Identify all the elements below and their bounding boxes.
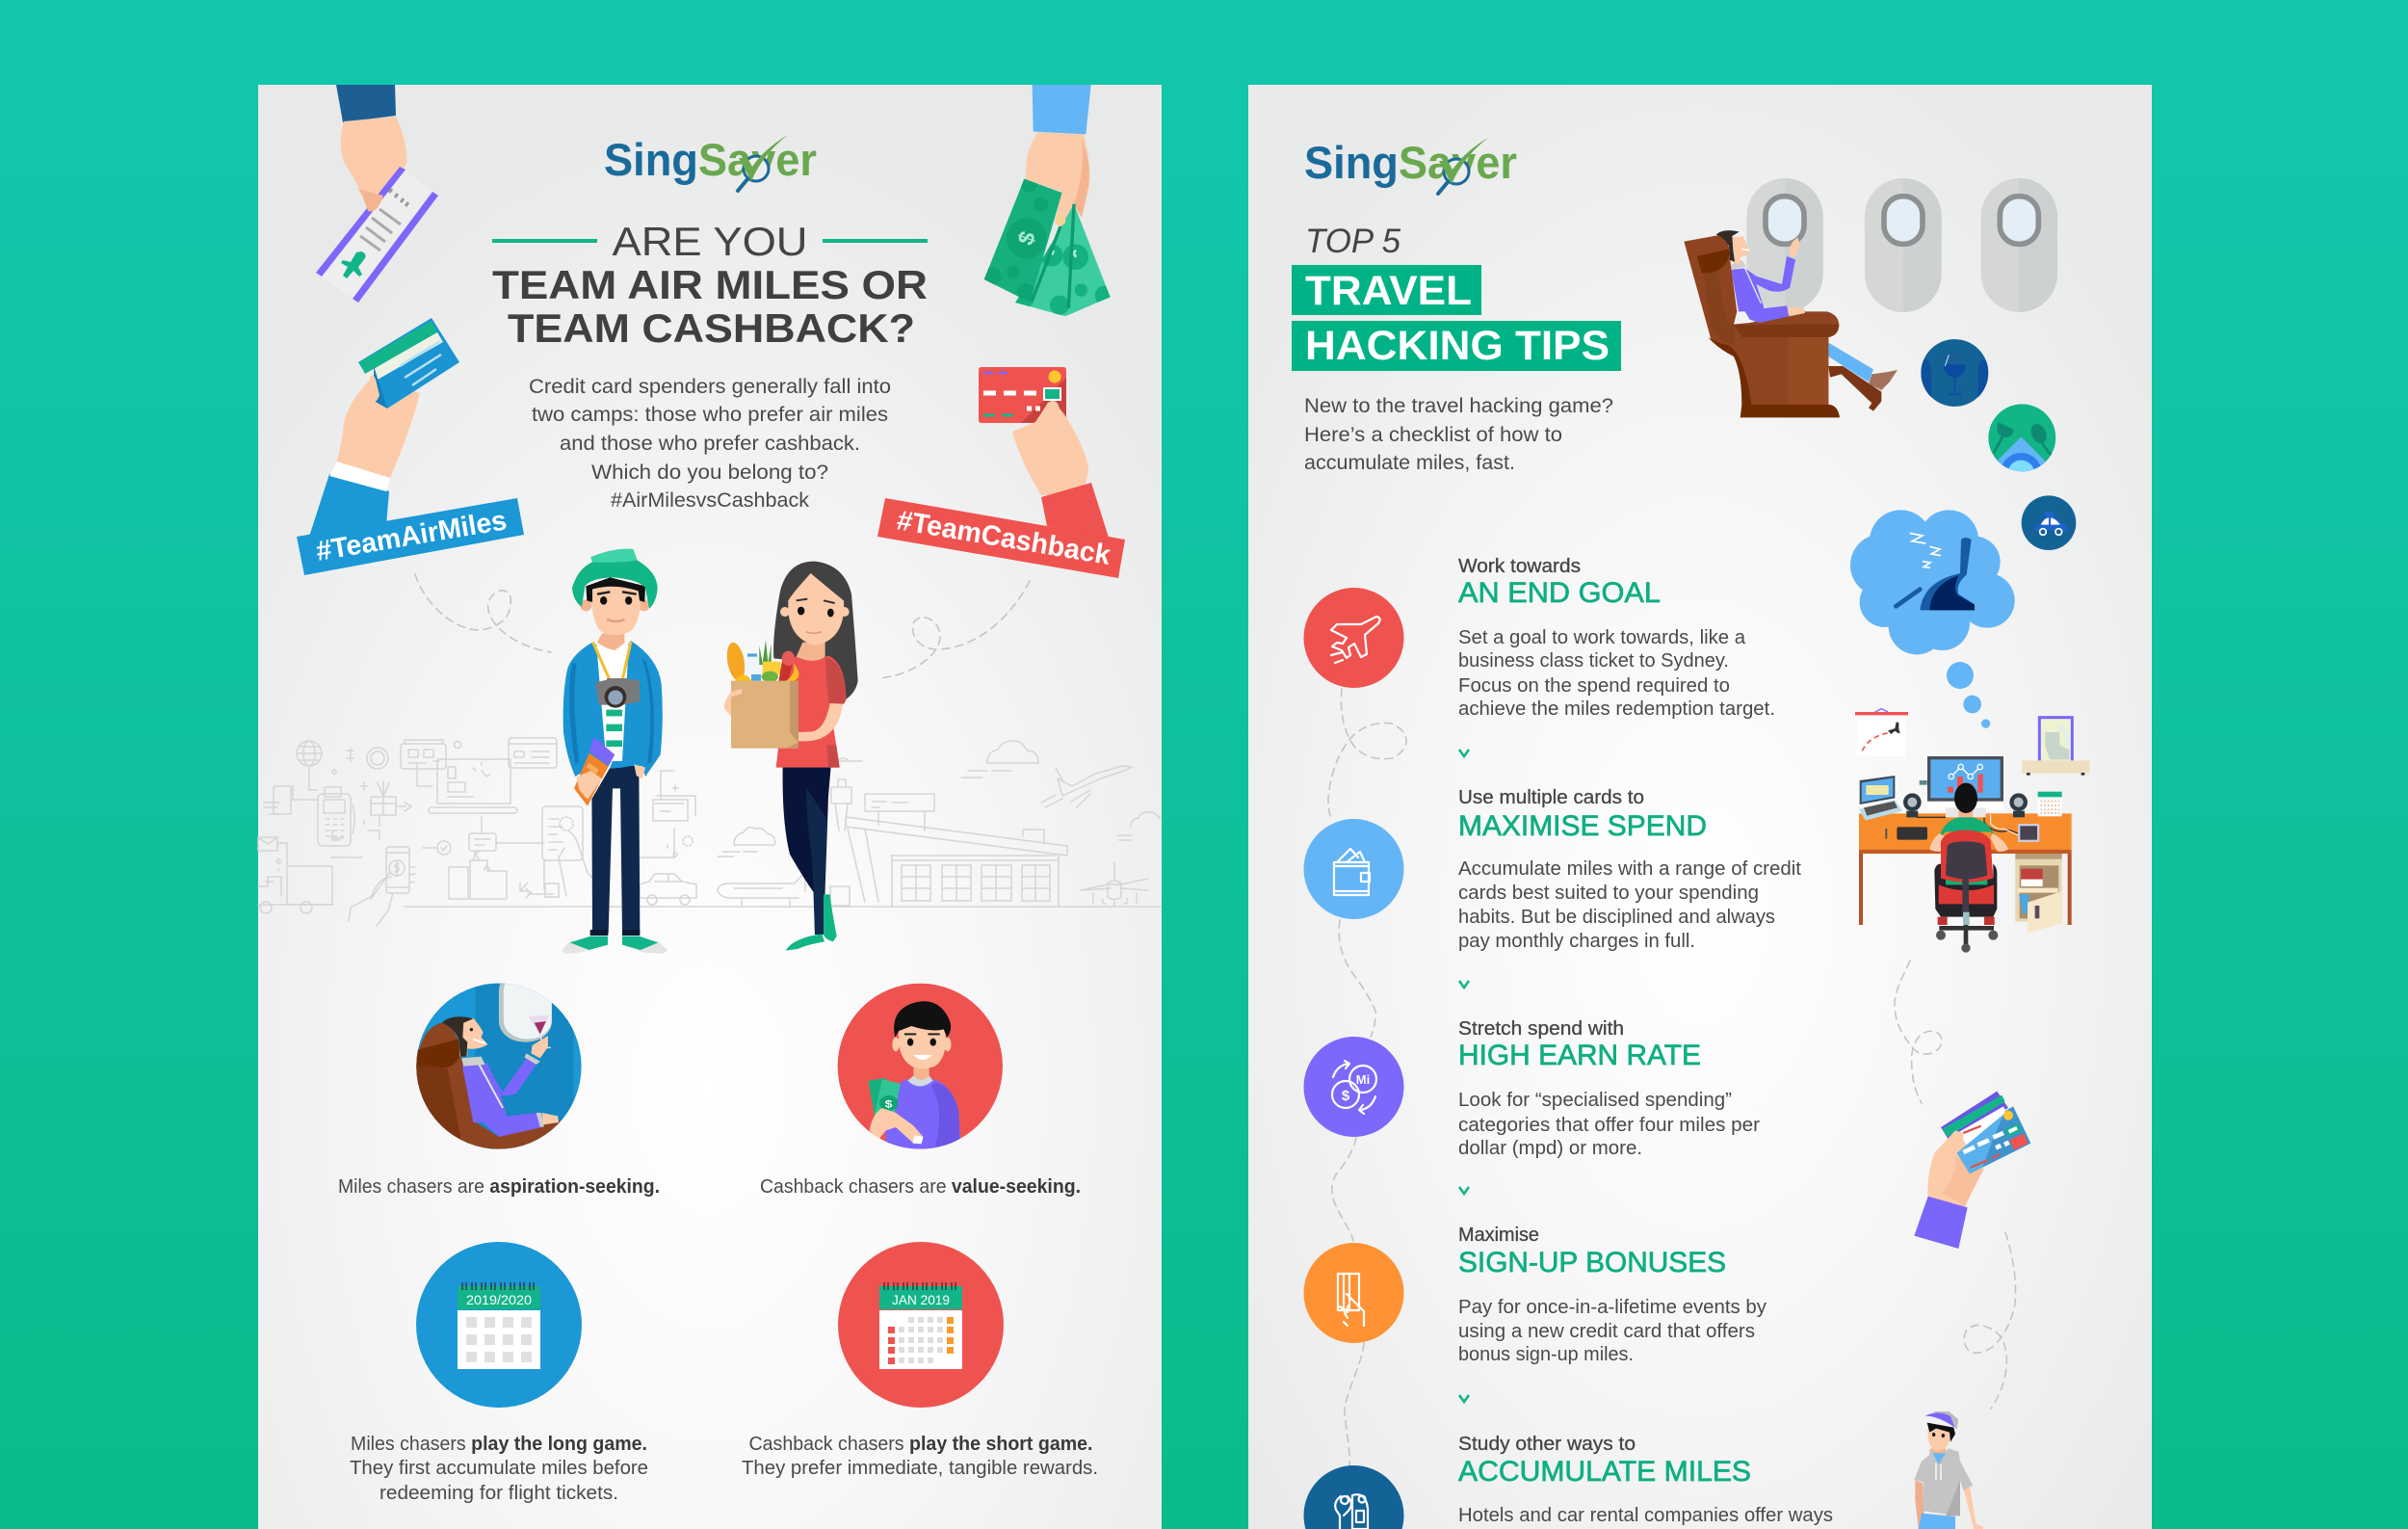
caption: They prefer immediate, tangible rewards.: [742, 1458, 1098, 1479]
icon: hand holding card: [1304, 1243, 1404, 1343]
tip copy: ACCUMULATE MILES: [1458, 1456, 1751, 1488]
caption: Miles chasers play the long game.: [351, 1434, 647, 1455]
tip copy: habits. But be disciplined and always: [1458, 907, 1775, 928]
caption: They first accumulate miles before: [350, 1458, 648, 1479]
hand holding red card with sleeve: [979, 367, 1109, 538]
illustration: standing man with cap: [1914, 1411, 1983, 1529]
dashed flight path right: [877, 581, 1030, 678]
icon: calendar 2019/2020: [416, 1242, 582, 1408]
tip copy: cards best suited to your spending: [1458, 883, 1759, 904]
intro paragraph: and those who prefer cashback.: [560, 433, 860, 455]
icon: miles and dollar exchange: [1304, 1037, 1404, 1137]
tip copy: Study other ways to: [1458, 1434, 1636, 1455]
intro text: New to the travel hacking game?: [1304, 395, 1613, 417]
heading: team air miles or team cashback: TEAM AIR MILES OR: [492, 262, 928, 307]
logo: SingSaver: [604, 134, 817, 185]
card: aspiration-seeking: [338, 970, 660, 1198]
icon: calendar Jan 2019: [838, 1242, 1004, 1408]
background line art: city and airport: [258, 738, 1161, 926]
character: man with camera: [562, 549, 667, 954]
tip copy: [1458, 1225, 1767, 1365]
tip copy: Accumulate miles with a range of credit: [1458, 858, 1801, 880]
tip 3: high earn rate: [1304, 1018, 1760, 1194]
icon: plane: [1304, 588, 1404, 688]
icon: hotel key: [1304, 1465, 1404, 1529]
hand holding blue card with sleeve: [308, 318, 459, 540]
heading: top 5: TOP 5: [1305, 223, 1401, 260]
panel: travel hacking tips: [1248, 85, 2152, 1529]
icon: car: [2022, 495, 2076, 550]
intro paragraph: [529, 376, 891, 512]
tip copy: AN END GOAL: [1458, 577, 1661, 609]
tip copy: [1458, 1018, 1760, 1159]
tip copy: bonus sign-up miles.: [1458, 1344, 1634, 1365]
illustration: man reclining in seat: [1684, 230, 1898, 417]
hand holding boarding pass: [316, 85, 438, 303]
icon: calendar Jan 2019: JAN 2019: [892, 1292, 950, 1307]
illustration: man on plane with wine: [416, 983, 582, 1149]
tip copy: [1458, 787, 1801, 952]
tip copy: SIGN-UP BONUSES: [1458, 1247, 1726, 1279]
intro paragraph: #AirMilesvsCashback: [611, 489, 810, 512]
chevron: [1459, 981, 1469, 988]
icon: wallet: [1304, 819, 1404, 919]
tip copy: Work towards: [1458, 556, 1581, 577]
icon: miles and dollar exchange: Mi: [1356, 1072, 1370, 1087]
logo: SingSaver: [1304, 137, 1517, 188]
tip copy: Set a goal to work towards, like a: [1458, 627, 1746, 648]
heading: are you: [492, 219, 928, 264]
caption: Miles chasers are aspiration-seeking.: [338, 1176, 660, 1198]
illustration: smiling man with cash: [837, 984, 1004, 1149]
hand holding money: $: [1012, 228, 1040, 249]
tip copy: [1458, 1434, 1833, 1526]
card: the long game: [350, 1242, 648, 1504]
tip copy: Hotels and car rental companies offer ways: [1458, 1505, 1833, 1526]
intro paragraph: two camps: those who prefer air miles: [532, 404, 888, 426]
heading: are you: ARE YOU: [613, 219, 807, 264]
tip copy: Stretch spend with: [1458, 1018, 1624, 1040]
character: woman with grocery bag: [724, 562, 858, 951]
chevron: [1459, 1187, 1469, 1194]
illustration: plane windows: [1746, 178, 2057, 312]
panel background left: [258, 85, 1162, 1529]
heading: hacking tips: HACKING TIPS: [1305, 323, 1610, 369]
tip 5: accumulate miles: [1304, 1434, 1833, 1529]
intro paragraph: Which do you belong to?: [591, 461, 828, 484]
caption: [350, 1434, 648, 1504]
card: the short game: [742, 1242, 1098, 1479]
icon: calendar 2019/2020: 2019/2020: [466, 1292, 532, 1307]
tip copy: MAXIMISE SPEND: [1458, 810, 1707, 842]
tip copy: using a new credit card that offers: [1458, 1321, 1755, 1342]
tip copy: business class ticket to Sydney.: [1458, 650, 1729, 672]
tip copy: [1458, 556, 1775, 720]
dashed path: right route: [1895, 961, 2016, 1409]
dashed path: left route: [1328, 689, 1406, 1465]
heading: team air miles or team cashback: [492, 262, 928, 351]
tip 1: an end goal: [1304, 556, 1775, 756]
heading: team air miles or team cashback: TEAM CASHBACK?: [508, 305, 915, 351]
tip copy: categories that offer four miles per: [1458, 1115, 1760, 1136]
intro text: [1304, 395, 1613, 474]
tip copy: pay monthly charges in full.: [1458, 931, 1695, 952]
dashed flight path left: [415, 574, 551, 652]
tip copy: Focus on the spend required to: [1458, 675, 1730, 697]
illustration: smiling man with cash: $: [885, 1097, 893, 1110]
tip copy: achieve the miles redemption target.: [1458, 699, 1775, 720]
illustration: man at desk: [1855, 709, 2089, 953]
tip copy: Use multiple cards to: [1458, 787, 1644, 808]
intro text: Here’s a checklist of how to: [1304, 424, 1562, 446]
ribbon: #TeamAirMiles: #TeamAirMiles: [314, 505, 509, 567]
chevron: [1459, 750, 1469, 756]
illustration: hand holding cards: [1914, 1092, 2030, 1249]
tip copy: Maximise: [1458, 1225, 1539, 1246]
tip copy: Pay for once-in-a-lifetime events by: [1458, 1297, 1767, 1318]
heading: travel: TRAVEL: [1305, 268, 1472, 314]
caption: [742, 1434, 1098, 1479]
icon: wine glass: [1921, 339, 1988, 407]
illustration: thought cloud with seat: [1850, 510, 2015, 728]
panel background right: [1248, 85, 2152, 1529]
icon: miles and dollar exchange: $: [1342, 1088, 1350, 1104]
tip 2: maximise spend: [1304, 787, 1801, 988]
tip copy: HIGH EARN RATE: [1458, 1040, 1701, 1071]
hand holding money: [983, 85, 1114, 316]
intro text: accumulate miles, fast.: [1304, 452, 1515, 474]
icon: dining: [1988, 404, 2055, 472]
chevron: [1459, 1395, 1469, 1402]
caption: redeeming for flight tickets.: [380, 1483, 618, 1504]
tip 4: sign-up bonuses: [1304, 1225, 1767, 1402]
tip copy: dollar (mpd) or more.: [1458, 1138, 1642, 1159]
ribbon: #TeamCashback: #TeamCashback: [895, 505, 1113, 571]
caption: Cashback chasers play the short game.: [749, 1434, 1092, 1455]
tip copy: Look for “specialised spending”: [1458, 1090, 1732, 1111]
intro paragraph: Credit card spenders generally fall into: [529, 376, 891, 398]
card: value-seeking: [760, 984, 1081, 1198]
caption: Cashback chasers are value-seeking.: [760, 1176, 1081, 1198]
panel: air miles vs cashback: [258, 85, 1162, 1529]
